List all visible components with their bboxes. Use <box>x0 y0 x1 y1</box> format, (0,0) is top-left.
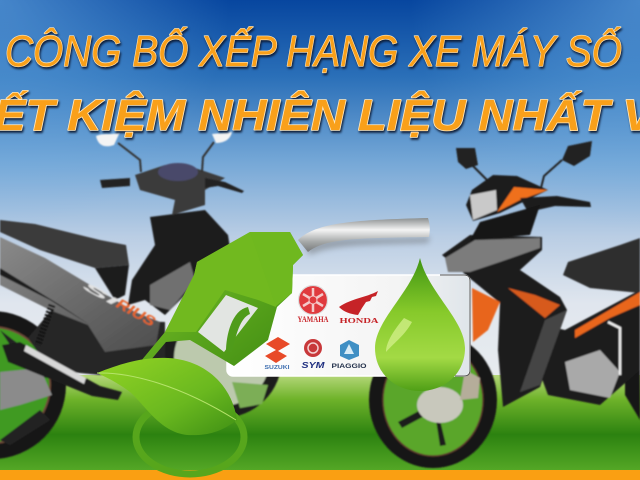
logo: SYM <box>302 339 325 370</box>
fuel nozzle <box>136 232 303 367</box>
leaf stem ring <box>136 400 244 474</box>
handlebar right grip <box>205 178 244 193</box>
logo: Honda: HONDA <box>340 316 379 325</box>
neck <box>470 205 540 240</box>
sky right corner glow <box>400 0 640 240</box>
handlebars <box>520 196 591 212</box>
orange footer bar <box>0 470 640 480</box>
nozzle handle opening <box>198 295 258 352</box>
logo: Suzuki <box>264 337 290 371</box>
model logo: SI <box>81 280 123 311</box>
right mirror <box>541 141 592 188</box>
exhaust pipe <box>2 342 122 400</box>
body swing arm <box>520 290 640 405</box>
engine and frame <box>28 300 165 375</box>
logo: Suzuki: SUZUKI <box>264 365 290 371</box>
right motorbike <box>369 141 640 468</box>
left mirror <box>96 132 141 172</box>
rear wheel <box>0 311 66 459</box>
logo: SYM: SYM <box>302 361 325 370</box>
leg shield <box>128 210 230 315</box>
left motorbike <box>0 132 282 459</box>
seat <box>0 220 129 268</box>
seat <box>563 238 640 293</box>
fuel drop <box>375 258 465 391</box>
side body panel <box>0 237 160 352</box>
title line 2: ẾT KIỆM NHIÊN LIỆU NHẤT V <box>0 90 640 140</box>
nozzle trigger <box>226 307 250 352</box>
headlight <box>470 190 497 220</box>
leaf and loop <box>97 358 244 474</box>
upper chrome cowl <box>445 238 540 272</box>
left mirror <box>456 148 487 180</box>
main body shell <box>442 235 567 407</box>
headstock and speedometer <box>135 165 225 215</box>
front wheel <box>369 332 497 468</box>
sky left corner glow <box>0 0 240 240</box>
grey side panel <box>520 310 567 392</box>
logo: Honda <box>339 291 379 325</box>
kick stand <box>608 322 620 375</box>
orange body stripe <box>508 288 560 318</box>
headlight cowl <box>466 175 548 221</box>
handlebar left grip <box>100 178 130 188</box>
brands panel <box>227 275 470 376</box>
rear panel with stripe <box>575 292 640 338</box>
orange fender panel <box>472 288 500 342</box>
fuel hose pipe <box>298 218 430 255</box>
engine <box>565 350 620 398</box>
suspension spring <box>38 305 52 345</box>
logo: Yamaha <box>298 286 329 324</box>
model logo <box>81 277 159 330</box>
sky background <box>0 0 640 380</box>
drop highlight <box>386 318 412 352</box>
rear wheel <box>625 345 640 420</box>
leaf <box>97 358 237 435</box>
logo: Piaggio: PIAGGIO <box>332 363 366 370</box>
model logo: RIUS <box>114 295 159 330</box>
front wheel <box>162 298 282 418</box>
right mirror <box>202 132 232 172</box>
logo: Piaggio <box>332 340 366 370</box>
orange nose <box>497 187 548 212</box>
engine fins <box>0 368 52 410</box>
logo: Yamaha: YAMAHA <box>298 315 329 324</box>
grass ground <box>0 375 640 471</box>
